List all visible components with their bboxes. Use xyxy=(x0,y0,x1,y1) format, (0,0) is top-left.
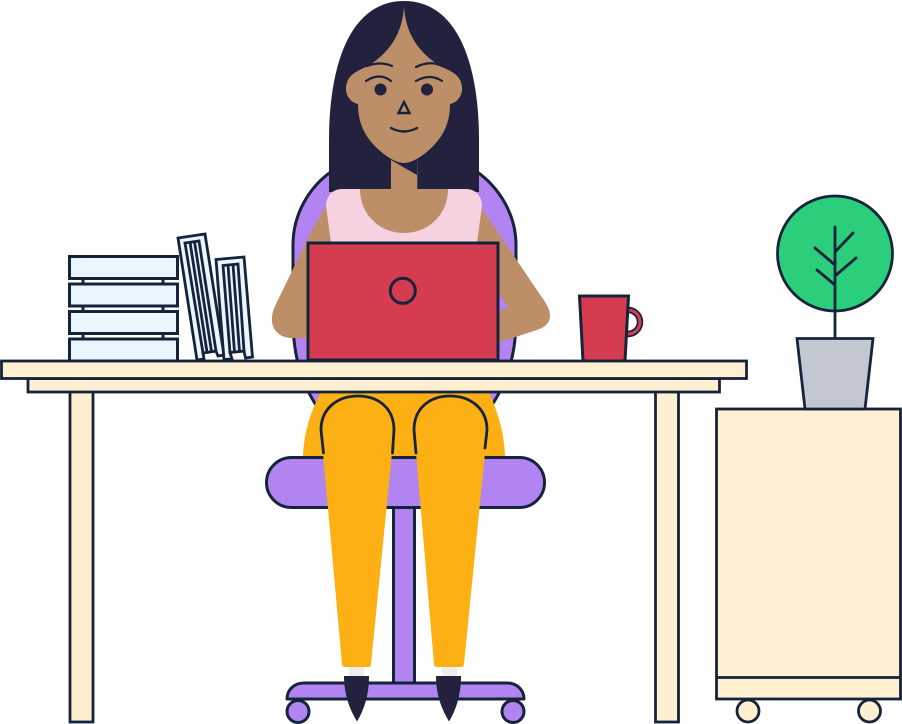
chair gap by right arm xyxy=(498,292,508,312)
cabinet body xyxy=(716,409,900,699)
flat book 3 xyxy=(70,312,178,334)
pink top xyxy=(326,189,482,250)
upright book left xyxy=(178,234,224,360)
head xyxy=(346,6,462,163)
plant foliage xyxy=(778,196,892,311)
chair wheel left xyxy=(287,700,309,722)
stack of books xyxy=(70,256,178,361)
laptop xyxy=(308,243,498,360)
desk leg right xyxy=(656,391,678,722)
mug body xyxy=(580,296,628,361)
nose xyxy=(398,102,410,113)
mug handle xyxy=(616,310,640,334)
hair highlight line xyxy=(416,160,418,190)
leg right xyxy=(414,396,487,667)
knee outline right xyxy=(414,396,487,453)
flat book 4 xyxy=(70,339,178,361)
book connectors xyxy=(83,278,163,339)
plant stem and branches xyxy=(815,227,856,338)
chair base xyxy=(287,683,524,699)
flat book 1 xyxy=(70,256,178,278)
eye left xyxy=(374,84,386,96)
hair xyxy=(329,1,479,192)
shoe right xyxy=(436,676,461,722)
neck xyxy=(391,160,417,191)
office chair xyxy=(287,171,524,722)
sock right xyxy=(442,667,457,676)
chair seat xyxy=(266,458,544,508)
plant pot xyxy=(797,338,873,409)
sock left xyxy=(349,667,364,676)
neckline xyxy=(360,189,448,233)
desk leg left xyxy=(70,391,93,722)
flat book 2 xyxy=(70,284,178,306)
arm right xyxy=(470,206,550,344)
legs xyxy=(321,396,487,722)
chair back xyxy=(293,171,516,408)
cabinet wheel right xyxy=(858,700,880,722)
arm left xyxy=(272,204,345,338)
upright book right xyxy=(216,257,252,360)
shoe left xyxy=(344,676,369,722)
chair post xyxy=(394,500,414,686)
mouth xyxy=(391,128,417,132)
face xyxy=(346,6,462,163)
chair wheel right xyxy=(502,700,524,722)
desk top xyxy=(2,361,746,378)
cabinet drawer line xyxy=(716,676,900,679)
desk apron xyxy=(28,378,720,392)
lap xyxy=(303,390,505,460)
knee outline left xyxy=(321,396,394,453)
coffee mug xyxy=(580,296,640,361)
cabinet wheel left xyxy=(737,700,759,722)
leg left xyxy=(321,396,394,667)
cabinet xyxy=(716,409,900,722)
laptop logo xyxy=(390,278,415,303)
eye right xyxy=(421,84,433,96)
desk xyxy=(2,361,746,722)
laptop lid xyxy=(308,243,498,360)
eyebrows xyxy=(366,63,442,81)
potted plant xyxy=(778,196,892,409)
